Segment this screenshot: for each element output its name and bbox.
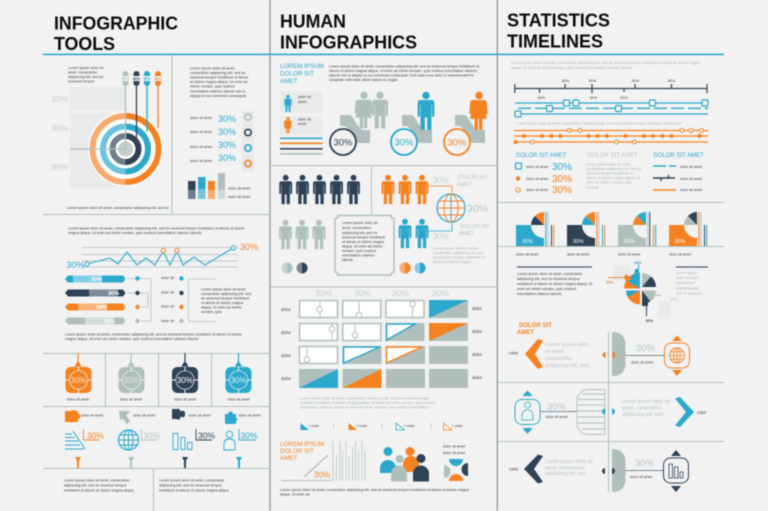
text block: rose note left <box>517 267 592 296</box>
subheading: lorem ipsum: AMET <box>280 78 298 85</box>
text block: footer left: incididunt ut labore et dolore magna aliqua <box>64 488 134 492</box>
text block: matrix note: exercitation ullamco laboris ut enim ad minim veniam, quis nostrud exercitation <box>300 406 429 410</box>
pie card: orange <box>669 212 707 256</box>
text block: ring caption: Lorem ipsum dolor sit amet, consectetur adipiscing elit, sed do <box>67 206 169 210</box>
heading: statistics timelines: STATISTICS <box>507 10 610 30</box>
section separators <box>43 55 270 511</box>
puzzle tile: grey: 30% <box>123 376 140 385</box>
timeline: blue lines <box>515 100 708 117</box>
heading: infographic tools: INFOGRAPHIC <box>54 12 178 34</box>
pie card: blue: 30% <box>522 239 533 245</box>
subheading: dolor sit amet orange: DOLOR SIT <box>519 323 552 329</box>
text block: legend note: enim ad minim veniam, quis <box>586 180 632 184</box>
text block: line chart intro: magna aliqua. Ut enim ad minim veniam, quis nostrud exercitation ullamco laboris <box>68 231 202 235</box>
text block: rose note right: Lorem ipsum <box>676 271 697 275</box>
people group <box>380 447 429 482</box>
text block: bracket note: consectetur adipiscing elit, sed <box>201 292 251 296</box>
globe stat: AMET <box>457 182 473 188</box>
icon: lines with percent <box>65 429 104 449</box>
legend: markers: dolor sit amet <box>526 177 548 181</box>
heading: human infographics <box>280 10 417 52</box>
timeline: navy axis: 30% <box>588 79 597 83</box>
globe stat: 30% <box>433 176 449 185</box>
text block: legend intro: aliquip ex ea commodo consequat. <box>190 94 247 98</box>
legend: dots: dolor sit <box>161 304 174 308</box>
text block: legend note: consectetur adipiscing elit, sed do <box>586 167 641 171</box>
row: orange chevron globe: color <box>509 350 519 356</box>
text block: ring note: adipiscing elit, sed do <box>68 75 103 79</box>
matrix chart: dolor <box>281 376 292 381</box>
text block: legend intro <box>190 66 248 98</box>
row: blue person and stripes: amet, consectetur <box>622 406 662 412</box>
progress pills: 30% <box>108 291 119 297</box>
progress pills: 30% <box>96 305 107 311</box>
section separators <box>498 202 724 492</box>
pie card: orange: 30% <box>674 239 686 245</box>
text block: matrix note: incididunt ut labore et dolore magna aliqua. Ut enim ad minim veniam, quis nostrud <box>300 401 435 405</box>
subheading: orange lorem: DOLOR SIT <box>280 448 314 455</box>
timeline: orange lines <box>514 128 708 144</box>
text block: legend intro: consectetur adipiscing elit, sed do <box>190 71 245 75</box>
row: navy chevron bars: color <box>509 466 519 472</box>
icon: globe with percent: 30% <box>143 430 160 440</box>
timeline: navy axis: 30% <box>590 96 598 100</box>
heading: human infographics: INFOGRAPHICS <box>280 32 417 52</box>
row: navy chevron bars: Lorem ipsum dolor sit <box>545 459 593 465</box>
text block: rose note left: enim ad minim veniam, quis nostrud <box>517 287 576 291</box>
row: navy chevron bars: 30% <box>635 458 655 469</box>
text block: legend note: nostrud <box>586 186 598 190</box>
pie card: blue: dolor sit amet <box>516 252 538 256</box>
pie card: navy <box>567 212 605 256</box>
matrix chart <box>281 288 483 388</box>
line chart: 30% <box>66 260 85 270</box>
heading: human infographics: HUMAN <box>280 10 346 32</box>
matrix chart: dolor <box>472 329 483 334</box>
globe stat: labore et dolore magna <box>433 260 472 264</box>
row: orange chevron globe: consectetur <box>545 356 573 362</box>
timeline: navy axis: 30% <box>538 96 546 100</box>
text block: human intro <box>329 64 479 82</box>
text block: ring note: Lorem ipsum dolor sit <box>68 66 103 70</box>
text block: human footer: Lorem ipsum dolor sit amet, consectetur adipiscing elit, sed do eiusmod tempor incididunt ut labore et dolore magna <box>280 488 470 492</box>
text block: rose note right: dolor sit amet, <box>676 276 699 280</box>
subheading: dolor sit amet orange <box>517 323 552 336</box>
text block: footer left: adipiscing elit, sed do eiusmod tempor <box>64 484 127 488</box>
text block: footer right: incididunt ut labore et dolore magna aliqua <box>159 488 229 492</box>
figures: grey couple stat: 30% <box>333 138 353 148</box>
bar chart: dolor sit amet <box>228 186 250 190</box>
text block: timeline note: Lorem ipsum dolor sit amet, consectetur adipiscing elit, sed do eiusmod tempor incididunt ut labore et <box>516 122 681 126</box>
legend: gender: dolor sit <box>298 118 311 122</box>
text block: rose note left: adipiscing elit, sed do eiusmod tempor <box>517 277 580 281</box>
text block: footer left <box>64 478 134 492</box>
text block: line chart footer: magna aliqua. Ut enim ad minim veniam, quis nostrud exercitation ullamco laboris <box>65 337 199 341</box>
globe stat: 30% <box>467 203 488 215</box>
legend: triangles: + color <box>356 424 368 428</box>
halftone dots: colour <box>400 262 426 274</box>
text block: legend intro: exercitation ullamco laboris nisi ut <box>190 90 245 94</box>
pie card: blue <box>516 212 554 256</box>
callout box <box>335 216 394 275</box>
callout box: Lorem ipsum dolor sit <box>342 221 377 225</box>
legend: markers: dolor sit amet <box>526 188 548 192</box>
globe stat: Lorem ipsum dolor sit amet, <box>433 246 478 250</box>
puzzle tile: grey <box>118 353 144 402</box>
rose chart: 30% <box>646 319 654 323</box>
legend: gender: amet <box>298 122 306 126</box>
line chart: 30% <box>240 242 258 252</box>
legend: percent rows: 30% <box>218 153 236 163</box>
callout box: ut labore et dolore magna <box>342 240 385 244</box>
subheading: orange lorem: AMET <box>280 455 298 462</box>
text block: ring note: eiusmod tempor <box>68 80 95 84</box>
text block: line chart intro <box>68 226 245 235</box>
rose chart: 30% <box>670 298 678 302</box>
matrix chart: 30% <box>392 288 409 298</box>
text block: timelines intro: Lorem ipsum dolor sit amet, consectetur adipiscing elit, sed do eiusmod tempor incididunt ut labore et dolore magna <box>511 61 701 65</box>
puzzle tile: blue: 30% <box>230 376 247 385</box>
legend: dots <box>161 276 184 323</box>
callout box: laboris <box>342 258 353 262</box>
timeline: navy axis: 30% <box>632 79 640 83</box>
subheading: orange lorem: LOREM IPSUM <box>280 441 324 448</box>
pie card: grey: dolor sit amet <box>618 252 640 256</box>
legend: percent rows: 30% <box>218 114 236 124</box>
puzzle tile: navy <box>172 353 198 402</box>
callout box: exercitation ullamco <box>342 254 375 258</box>
puzzle tile: orange <box>66 353 92 402</box>
subheading: lorem ipsum: DOLOR SIT <box>280 70 314 78</box>
puzzle tile: navy: 30% <box>177 376 193 385</box>
people row: navy <box>279 175 360 204</box>
rose chart: 30% <box>606 280 614 284</box>
timeline: navy axis: 30% <box>620 96 628 100</box>
pie card: navy: dolor sit amet <box>567 252 589 256</box>
text block: bracket note: Lorem ipsum dolor sit amet <box>201 288 245 292</box>
pie card: navy: 30% <box>572 239 584 245</box>
globe stat: 30% <box>433 232 449 241</box>
legend: gender <box>280 92 322 155</box>
matrix chart: 30% <box>315 288 332 298</box>
chart: concentric rings: 30% <box>51 123 68 133</box>
callout box: veniam, quis nostrud <box>342 249 376 253</box>
figure: blue man stat <box>391 92 434 155</box>
text block: rose note right: consectetur <box>676 281 696 285</box>
subheading: dolor sit amet orange: AMET <box>517 330 534 336</box>
panel: human infographics column <box>270 10 497 496</box>
text block: line chart footer <box>65 332 242 341</box>
row: navy chevron bars: amet, consectetur <box>545 466 585 472</box>
text block: legend intro: Lorem ipsum dolor sit amet, <box>190 66 236 70</box>
icon row: puzzle pieces: dolor sit amet <box>238 414 261 418</box>
text block: timelines intro <box>511 61 701 70</box>
figure: orange woman stat <box>444 92 488 155</box>
column dividers <box>270 0 497 511</box>
legend: markers: 30% <box>552 162 572 173</box>
chart: concentric rings: 30% <box>133 77 141 81</box>
wedge chart <box>281 441 365 481</box>
text block: human intro: laboris nisi ut aliquip ex ea commodo consequat. Duis aute irure dolor in reprehenderit in <box>329 74 474 78</box>
text block: human footer: aliqua. Ut enim ad <box>280 492 310 496</box>
row: blue person and stripes: Lorem ipsum dolor sit <box>622 399 670 405</box>
icon: quarter dial: dolor sit amet <box>443 444 465 448</box>
rose chart <box>606 261 678 323</box>
row: orange chevron globe: dolor sit amet <box>631 360 653 364</box>
row: blue person and stripes: adipiscing elit, sed <box>622 412 663 418</box>
puzzle tile: blue: dolor sit amet <box>227 398 250 402</box>
text block: timelines intro: aliqua. Ut enim ad minim veniam, quis nostrud exercitation ullamco laboris <box>511 66 632 70</box>
text block: ring note: amet, consectetur <box>68 70 98 74</box>
text block: footer left: Lorem ipsum dolor sit amet, consectetur <box>64 478 130 482</box>
text block: ring note <box>68 66 103 84</box>
legend: percent rows: dolor sit amet <box>190 130 212 134</box>
heading: statistics timelines <box>507 10 610 52</box>
people row: grey <box>279 220 325 249</box>
legend: percent rows <box>190 111 254 172</box>
text block: matrix note <box>300 396 435 410</box>
globe stat: do eiusmod tempor incididunt ut <box>433 256 485 260</box>
row: navy chevron bars <box>509 449 688 492</box>
matrix chart: dolor <box>281 353 292 358</box>
legend: markers: 30% <box>552 185 572 196</box>
callout box: adipiscing elit, sed do <box>342 231 377 235</box>
icon row: pins <box>75 457 242 468</box>
halftone dots: neutral <box>282 262 308 274</box>
row: orange chevron globe: 30% <box>636 343 656 354</box>
legend: dots: dolor sit <box>161 319 174 323</box>
icon: quarter dial: dolor sit amet <box>443 451 465 455</box>
text block: legend note: DOLOR SIT AMET <box>588 153 638 159</box>
row: orange chevron globe: sit amet, <box>545 349 565 355</box>
text block: bracket note: aliqua. Ut enim ad minim <box>201 306 242 310</box>
figures: grey couple stat <box>330 92 388 155</box>
text block: legend note: labore et dolore magna aliqua. Ut <box>586 176 641 180</box>
subheading: orange lorem <box>280 441 324 462</box>
text block: legend intro: et dolore magna aliqua. Ut enim ad <box>190 80 247 84</box>
icon: globe with percent <box>118 429 160 450</box>
legend: markers <box>516 153 572 196</box>
progress pills: 30% <box>91 277 102 283</box>
legend: triangles: + color <box>308 424 320 428</box>
icon: bars with percent <box>173 429 215 450</box>
wedge chart: 30% <box>314 470 330 480</box>
text block: legend note: eiusmod tempor incididunt ut <box>586 172 633 176</box>
legend: dots: dolor sit <box>161 276 174 280</box>
text block: rose note right <box>676 267 708 296</box>
globe stat: AMET <box>459 231 475 237</box>
figure: blue man stat: 30% <box>394 138 414 148</box>
heading: statistics timelines: TIMELINES <box>507 30 603 52</box>
legend: percent rows: dolor sit amet <box>190 145 212 149</box>
icon row: puzzle pieces: dolor sit amet <box>133 414 155 418</box>
pie card: grey <box>618 212 656 256</box>
progress pills: 30% <box>104 319 115 325</box>
timeline: navy axis: 30% <box>668 79 676 83</box>
legend: line styles <box>653 153 704 192</box>
text block: bracket note: ut labore et dolore magna <box>201 301 244 305</box>
text block: rose note left: exercitation ullamco laboris <box>517 292 562 296</box>
row: orange chevron globe <box>509 332 690 376</box>
chart: concentric rings <box>51 71 164 188</box>
puzzle tile: orange: dolor sit amet <box>67 398 89 402</box>
text block: line chart intro: Lorem ipsum dolor sit amet, consectetur adipiscing elit, sed do eiusmod tempor incididunt ut labore et dolore <box>68 226 245 230</box>
text block: matrix note: Lorem ipsum dolor sit amet, consectetur adipiscing elit, sed do eiusmod tempor <box>300 396 430 400</box>
bar chart <box>188 173 250 199</box>
legend: triangles <box>300 423 463 430</box>
icon: lines with percent: 30% <box>87 430 104 440</box>
row: orange chevron globe: Lorem ipsum dolor <box>545 342 589 348</box>
legend: percent rows: dolor sit amet <box>190 159 212 163</box>
icon: bars with percent: 30% <box>198 430 215 440</box>
legend: percent rows: 30% <box>218 140 236 150</box>
callout box: aliqua. Ut enim ad minim <box>342 244 383 248</box>
legend: line styles: DOLOR SIT AMET <box>654 153 704 159</box>
pie card: orange: dolor sit amet <box>669 252 691 256</box>
icon: person with percent <box>224 429 258 450</box>
text block: legend note: Lorem ipsum dolor sit amet, <box>586 162 632 166</box>
line chart <box>66 242 258 270</box>
chart: concentric rings: 30% <box>51 94 68 104</box>
row: navy chevron bars: adipiscing elit, sed <box>545 471 586 477</box>
matrix chart: dolor <box>472 352 483 357</box>
matrix chart: 30% <box>354 288 371 298</box>
row: blue person and stripes: dolor sit amet <box>546 415 568 419</box>
legend: line styles: dolor sit amet <box>680 188 702 192</box>
heading: infographic tools <box>54 12 178 54</box>
legend: markers: DOLOR SIT AMET <box>516 153 567 159</box>
heading: infographic tools: TOOLS <box>54 33 115 54</box>
callout box: amet, consectetur <box>342 226 372 230</box>
row: navy chevron bars: dolor sit amet <box>630 475 652 479</box>
chart: concentric rings: 30% <box>143 77 151 81</box>
row: blue person and stripes: color <box>697 410 707 415</box>
chart: concentric rings: 30% <box>51 162 68 172</box>
legend: triangles: + color <box>404 424 415 428</box>
subheading: lorem ipsum <box>280 63 324 85</box>
matrix chart: dolor <box>472 375 483 380</box>
legend: line styles: dolor sit amet <box>680 165 702 169</box>
legend: markers: dolor sit amet <box>526 165 548 169</box>
globe stat <box>428 174 490 264</box>
text block: footer right: Lorem ipsum dolor sit amet, consectetur <box>159 478 225 482</box>
chart: concentric rings: 30% <box>154 77 162 81</box>
globe stat: DOLOR SIT <box>458 174 488 180</box>
matrix chart: dolor <box>281 307 292 312</box>
timeline: navy axis <box>515 79 707 100</box>
subheading: lorem ipsum: LOREM IPSUM <box>280 63 324 70</box>
globe stat: DOLOR SIT <box>460 224 490 230</box>
globe stat: consectetur adipiscing elit, sed <box>433 251 483 255</box>
icon row: puzzle pieces <box>65 409 261 424</box>
text block: rose note right: sed do eiusmod <box>676 292 702 296</box>
row: blue person and stripes <box>515 390 707 434</box>
matrix chart: 30% <box>432 288 449 298</box>
people row: orange <box>382 175 428 204</box>
text block: bracket note: do eiusmod tempor incididunt <box>201 296 249 300</box>
legend: line styles: dolor sit amet <box>680 177 702 181</box>
text block: bracket note <box>188 279 251 322</box>
text block: rose note right: adipiscing elit, <box>676 286 699 290</box>
panel: statistics timelines column <box>498 10 724 492</box>
text block: bracket note: veniam, quis <box>201 310 222 314</box>
icon: person with percent: 30% <box>240 430 258 440</box>
matrix chart: dolor <box>472 306 483 311</box>
people row: blue <box>399 219 428 248</box>
text block: human footer <box>280 488 470 496</box>
chart: concentric rings: 30% <box>122 77 130 81</box>
legend: dots: dolor sit <box>161 290 174 294</box>
puzzle tile: grey: dolor sit amet <box>120 398 142 402</box>
bar chart: dolor sit amet <box>228 195 250 199</box>
icon row: puzzle pieces: dolor sit amet <box>81 414 103 418</box>
legend: percent rows: 30% <box>218 127 236 137</box>
section separators <box>270 165 497 287</box>
text block: legend intro: minim veniam, quis nostrud <box>190 84 235 88</box>
text block: footer right: adipiscing elit, sed do eiusmod tempor <box>159 484 222 488</box>
icon row: puzzle pieces: dolor sit amet <box>188 414 211 418</box>
text block: legend note <box>586 153 641 190</box>
text block: line chart footer: Lorem ipsum dolor sit amet, consectetur adipiscing elit, sed do eiusmod tempor incididunt ut labore et dolore <box>65 332 242 336</box>
pie card: grey: 30% <box>624 239 635 245</box>
rose chart: 30% <box>634 261 642 265</box>
text block: human intro: voluptate velit esse cillum dolore eu fugiat <box>329 78 397 82</box>
text block: human intro: Lorem ipsum dolor sit amet, consectetur adipiscing elit, sed do eiusmod tempor incididunt ut <box>329 64 479 68</box>
legend: markers: 30% <box>552 174 572 185</box>
text block: rose note left: Lorem ipsum dolor sit amet, consectetur <box>517 272 583 276</box>
callout box: eiusmod tempor incididunt <box>342 236 385 240</box>
text block: footer right <box>159 478 229 492</box>
puzzle tile: navy: dolor sit amet <box>174 398 196 402</box>
text block: legend intro: eiusmod tempor incididunt ut labore <box>190 76 248 80</box>
figure: orange woman stat: 30% <box>447 138 467 148</box>
timeline: navy axis: 30% <box>562 79 570 83</box>
matrix chart: dolor <box>281 330 292 335</box>
puzzle tile: blue <box>226 353 252 402</box>
row: orange chevron globe: adipiscing elit, sed <box>545 363 588 369</box>
text block: human intro: labore et dolore magna aliqua. Ut enim ad minim veniam, quis nostrud exercitation ullamco <box>329 69 477 73</box>
puzzle tile: orange: 30% <box>70 376 87 385</box>
row: blue person and stripes: 30% <box>547 402 567 412</box>
text block: rose note left: incididunt ut labore et dolore magna aliqua. Ut <box>517 282 592 286</box>
legend: gender: amet <box>298 100 306 104</box>
heading rule <box>43 54 724 55</box>
icon: quarter dial <box>443 444 468 481</box>
legend: triangles: + color <box>452 424 463 428</box>
legend: gender: dolor sit <box>298 95 311 99</box>
progress pills <box>65 276 151 325</box>
legend: percent rows: dolor sit amet <box>190 116 212 120</box>
